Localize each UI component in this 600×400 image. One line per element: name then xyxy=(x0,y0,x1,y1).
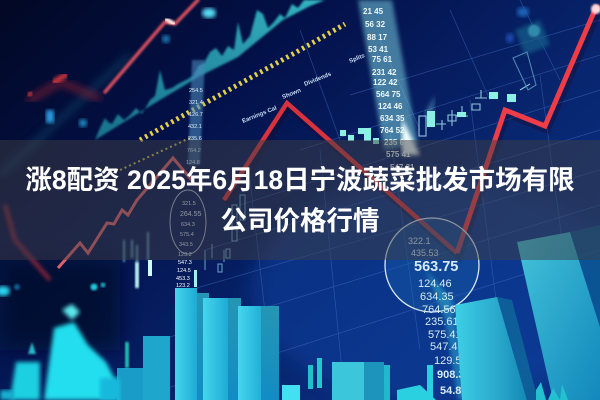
number column centre: 764 52 xyxy=(380,126,405,135)
number column centre: 235 61 xyxy=(384,138,409,147)
blurred red line top left xyxy=(28,0,198,100)
circled number callout: 124.46 xyxy=(418,278,452,290)
circled number callout xyxy=(385,218,479,400)
axis labels xyxy=(242,53,367,125)
number column centre: 75 61 xyxy=(372,55,393,64)
number column left: 235.6 xyxy=(188,136,202,142)
circled number callout: 563.75 xyxy=(414,259,458,275)
number column centre: 122 42 xyxy=(373,78,398,87)
number column left: 321.5 xyxy=(182,201,196,207)
title: 公司价格行情 xyxy=(220,206,380,236)
number column left xyxy=(170,60,206,289)
number column left: 124.5 xyxy=(177,268,191,274)
axis labels: Shown xyxy=(282,88,302,101)
number column left: 123.2 xyxy=(176,283,190,289)
cyan 3D bars centre xyxy=(117,288,300,400)
number column left: 321.4 xyxy=(189,100,203,106)
circled number callout: 435.53 xyxy=(411,248,439,258)
translucent title band xyxy=(0,140,600,260)
number column centre: 88 17 xyxy=(367,33,388,42)
circled number callout: 54.8 xyxy=(440,385,461,397)
number column left: 547.3 xyxy=(178,260,192,266)
number column left: 264.55 xyxy=(180,211,202,218)
axis labels: Splits xyxy=(349,53,367,65)
candlesticks xyxy=(124,52,536,288)
circled number callout: 322.1 xyxy=(408,236,431,246)
circled number callout: 547.4 xyxy=(430,341,458,353)
number column left: 453.3 xyxy=(176,276,190,282)
circled number callout: 634.35 xyxy=(420,291,454,303)
number column left: 123.2 xyxy=(178,252,192,258)
number column left: 124.8 xyxy=(186,160,200,166)
teal histogram xyxy=(95,0,325,140)
number column left: 254.5 xyxy=(189,88,203,94)
number column centre: 575 41 xyxy=(386,150,411,159)
number column centre: 56 32 xyxy=(365,20,386,29)
number column left: 575.4 xyxy=(180,232,194,238)
number column centre: 21 45 xyxy=(363,7,384,16)
yellow dashed trend line xyxy=(120,24,345,170)
title xyxy=(25,165,575,236)
number column centre: 231 42 xyxy=(372,68,397,77)
circled number callout: 764.56 xyxy=(422,304,456,316)
number column left: 764.2 xyxy=(187,148,201,154)
circled number callout: 575.41 xyxy=(428,329,462,341)
left dark red descending line xyxy=(5,205,50,280)
cyan 3D bars right xyxy=(308,225,600,400)
circled number callout: 129.5 xyxy=(434,355,462,367)
number column centre: 124 46 xyxy=(378,102,403,111)
number column centre: 547 31 xyxy=(390,163,415,172)
blurred teal lights xyxy=(46,7,550,127)
number column centre: 634 35 xyxy=(380,114,405,123)
number column centre xyxy=(358,0,420,172)
number column left: 634.3 xyxy=(181,222,195,228)
number column left: 343.5 xyxy=(179,242,193,248)
blurred cyan bars left xyxy=(0,282,120,400)
title: 涨8配资 2025年6月18日宁波蔬菜批发市场有限 xyxy=(25,165,575,195)
circled number callout: 235.61 xyxy=(425,316,459,328)
main red trend line xyxy=(58,4,600,268)
number column left: 126.7 xyxy=(189,112,203,118)
number column left: 432.1 xyxy=(188,124,202,130)
axis labels: Dividends xyxy=(304,71,333,88)
number column centre: 564 75 xyxy=(376,90,401,99)
number column centre: 53 41 xyxy=(368,45,389,54)
circled number callout: 908.3 xyxy=(437,369,465,381)
axis labels: Earnings Cal xyxy=(242,105,278,125)
